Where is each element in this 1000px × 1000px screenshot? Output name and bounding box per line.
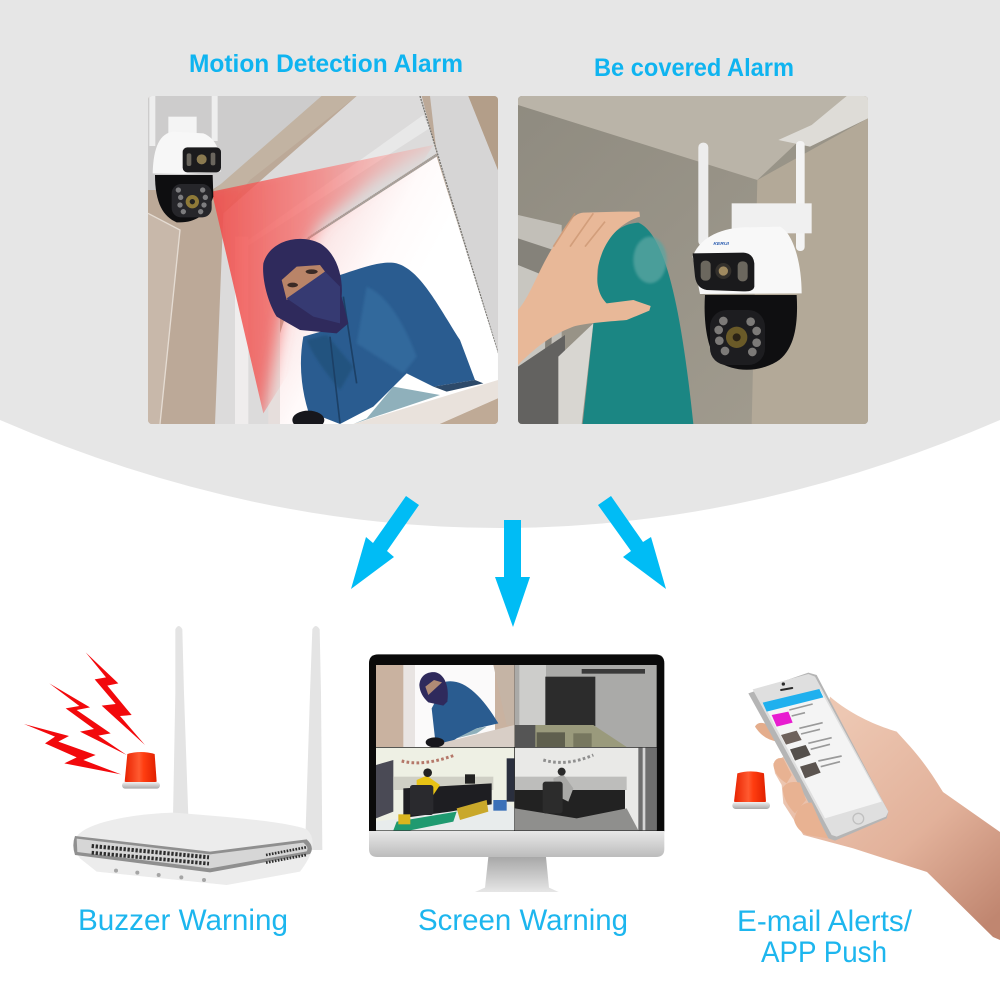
phone [748,673,888,841]
intruder [263,239,483,429]
heading: Motion Detection Alarm: Motion Detection Alarm [189,50,463,78]
security camera [693,141,812,370]
fingers behind phone [755,723,778,742]
alert list [772,704,842,778]
silver chin [369,831,664,857]
stand [475,857,559,892]
monitor with four camera feeds [369,654,664,892]
hand and forearm [773,697,1000,940]
bezel [369,654,664,832]
arrow: down [495,520,530,627]
window sill [353,380,498,424]
label: E-mail Alerts / APP Push: APP Push [761,936,887,969]
home button [853,813,864,824]
buzzer warning device [24,626,322,885]
room walls and ceiling [518,96,868,424]
hand [518,212,651,365]
teal cloth [583,223,693,424]
room wall and ceiling [148,96,498,424]
arrow: down left [351,496,419,589]
outdoor glare [280,157,498,424]
window frame [215,96,498,424]
lightning bolts [24,652,145,774]
label: Buzzer Warning: Buzzer Warning [78,904,288,937]
feed: colour office [376,748,514,830]
red detection cone [213,146,432,414]
label: E-mail Alerts / APP Push [737,905,913,969]
NVR body [73,813,313,885]
fingers in front [773,758,828,838]
photo: hand covering camera [518,96,868,424]
door frame and curtain [518,215,593,424]
grey curved top panel [0,0,1000,528]
label: E-mail Alerts / APP Push: E-mail Alerts/ [737,905,913,938]
arrow: down right [598,496,666,589]
security camera: KERUI [713,241,729,247]
feed: greyscale office [515,748,657,830]
label: Screen Warning: Screen Warning [418,904,628,937]
speaker [780,682,793,691]
feed: greyscale doorway [515,665,657,747]
photo: intruder detected by camera [148,96,498,429]
heading: Be covered Alarm: Be covered Alarm [594,54,794,82]
app header [763,689,823,712]
antennas [173,626,322,850]
phone screen [763,689,882,818]
red beacon [732,771,770,809]
red beacon [122,752,160,789]
feed: intruder [376,665,514,747]
security camera [149,96,221,222]
phone held in hand with alarm push [732,673,1000,940]
